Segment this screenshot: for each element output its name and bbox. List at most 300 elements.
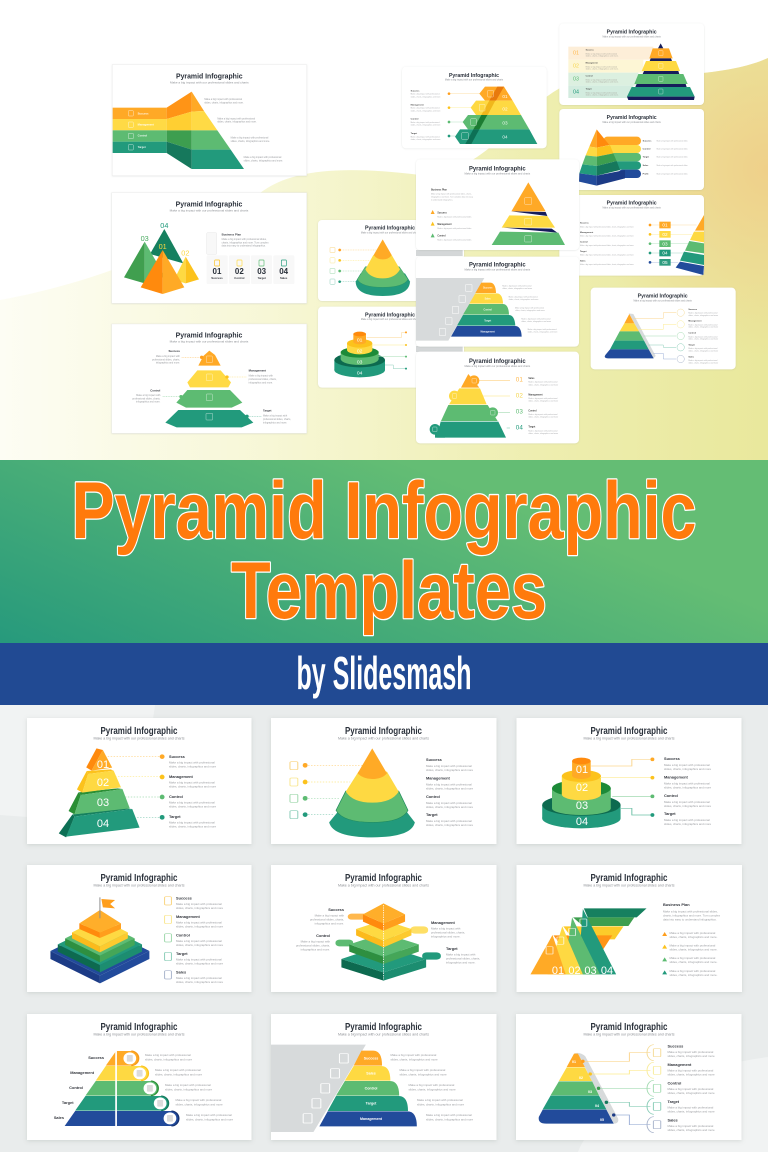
labels — [54, 1053, 233, 1122]
tier labels: Success — [169, 349, 180, 353]
heading: Make a big impact with our professional slides and charts — [602, 207, 662, 210]
group: right slides — [318, 23, 736, 443]
step labels: Sales — [366, 1072, 376, 1076]
tier labels: infographics and more. — [156, 362, 180, 365]
descriptions: slides, charts, infographics and more — [417, 1102, 464, 1106]
heading — [602, 115, 662, 124]
descriptions: Make a big impact with professional — [390, 1053, 436, 1057]
business plan text: slides, charts, infographics and more. — [670, 973, 718, 977]
labels: slides, charts, infographics and more — [176, 980, 223, 984]
heading — [361, 312, 420, 321]
stat tiles: 02 — [235, 267, 244, 276]
tier labels: professional slides, charts, — [263, 418, 291, 421]
cylinder numbers: 01 — [576, 764, 588, 776]
labels: slides, charts, infographics and more — [668, 1091, 715, 1095]
tab labels: Make a big impact with professional — [411, 94, 440, 96]
panel: staggered pyramid slide — [516, 865, 742, 992]
row labels: Make a big impact with professional slides, charts, infographics and more — [580, 235, 634, 238]
heading: Pyramid Infographic — [345, 1021, 422, 1033]
heading: Pyramid Infographic — [590, 725, 668, 737]
number boxes — [649, 222, 697, 266]
hexagon tabs pyramid chart — [448, 87, 537, 144]
heading: Make a big impact with our professional slides and charts — [170, 339, 249, 343]
heading: Pyramid Infographic — [469, 165, 526, 172]
business plan text: data into easy to understand infographics. — [663, 918, 717, 922]
side strip pyramid chart — [605, 309, 684, 363]
step descriptions: Make a big impact with professional — [521, 318, 550, 320]
bump numbers and labels: Management — [528, 393, 543, 396]
grey side pyramid chart: Control — [484, 308, 492, 311]
business plan text: Control — [437, 235, 446, 238]
labels: Make a big impact with professional — [668, 1087, 713, 1091]
heading: Pyramid Infographic — [345, 725, 422, 737]
separated tiers pyramid — [163, 351, 262, 427]
labels: Make a big impact with professional — [176, 939, 222, 943]
ribbon descriptions: slides, charts, infographics and more. — [231, 140, 270, 143]
panel: side strip pyramid slide — [591, 288, 736, 369]
group: left slides — [112, 65, 307, 433]
business plan text: Make a big impact with professional slides, — [222, 238, 267, 241]
bar labels: Make a big impact with professional slides — [657, 164, 688, 167]
heading: Pyramid Infographic — [345, 872, 422, 884]
heading: Pyramid Infographic — [638, 294, 688, 300]
panel: cone pyramid slide — [271, 718, 496, 844]
tab labels — [411, 90, 440, 141]
bump numbers and labels: Make a big impact with professional — [528, 414, 557, 416]
labels: Control — [664, 793, 678, 798]
panel: banded number slide — [559, 23, 704, 105]
labels: Make a big impact with professional — [176, 976, 222, 980]
3D pyramid with rounded bars — [579, 129, 641, 186]
labels: Success — [88, 1055, 104, 1060]
descriptions — [390, 1053, 473, 1122]
bar labels: Control — [643, 148, 651, 151]
heading — [94, 725, 185, 740]
labels: Management — [426, 776, 450, 780]
heading — [602, 201, 662, 210]
tab labels: slides, charts, infographics and more — [411, 124, 440, 127]
business plan text: Make a big impact with professional slides — [437, 239, 472, 242]
grey side pyramid chart: Management — [481, 330, 495, 333]
row labels: Make a big impact with professional slides, charts, infographics and more — [580, 225, 634, 228]
descriptions: slides, charts, infographics and more — [390, 1058, 438, 1062]
business plan text: slides, charts, infographics and more. — [670, 948, 718, 952]
business plan text: charts, infographics and more. Turn complex — [663, 914, 721, 918]
labels: slides, charts, infographics and more — [176, 906, 223, 910]
labels: slides, charts, infographics and more — [169, 764, 216, 768]
side strip labels: Management — [688, 320, 702, 323]
bar labels: Sales — [643, 165, 649, 167]
labels: slides, charts, infographics and more — [668, 1054, 715, 1058]
heading — [170, 72, 249, 85]
heading: Pyramid Infographic — [100, 1021, 178, 1033]
labels: infographics and more. — [446, 960, 476, 964]
labels: Success — [664, 756, 680, 761]
tab labels: Target — [411, 132, 417, 135]
labels: slides, charts, infographics and more — [668, 1128, 715, 1132]
labels: Management — [668, 1062, 692, 1067]
four pyramids chart — [124, 221, 199, 294]
tier labels: Control — [150, 388, 161, 392]
four pyramids chart: 03 — [141, 234, 149, 243]
labels: Make a big impact with professional — [664, 782, 710, 786]
ribbon descriptions: slides, charts, infographics and more. — [204, 101, 244, 104]
descriptions: slides, charts, infographics and more — [426, 1118, 473, 1122]
tier labels: Make a big impact with — [249, 375, 273, 378]
stat tiles: Sales — [280, 276, 288, 280]
3D numbered pyramid — [59, 748, 165, 837]
tab labels: Control — [411, 118, 419, 121]
labels: Make a big impact with — [315, 914, 344, 918]
side strip labels: Make a big impact with professional — [688, 336, 717, 338]
labels: Management — [169, 774, 193, 779]
tier labels: professional slides, charts, — [152, 358, 180, 361]
title band — [0, 460, 768, 644]
bump numbers and labels: slides, charts, infographics and more — [528, 383, 558, 386]
panel: numbered boxes slide — [559, 195, 704, 276]
heading: Make a big impact with our professional slides and charts — [633, 300, 693, 303]
panel: isometric flag pyramid slide — [27, 865, 252, 992]
step descriptions: slides, charts, infographics and more — [521, 320, 551, 323]
stat tiles: Control — [234, 276, 245, 280]
heading — [464, 358, 531, 368]
bar labels — [643, 139, 688, 175]
heading — [445, 73, 504, 82]
bump numbers and labels — [516, 376, 558, 435]
bar labels: Success — [643, 140, 652, 142]
business plan text: Success — [437, 212, 447, 214]
labels: Make a big impact with professional — [169, 780, 215, 784]
tab labels: slides, charts, infographics and more — [411, 95, 440, 98]
panel: stacked cylinders slide — [318, 307, 464, 388]
heading: Make a big impact with our professional slides and charts — [602, 35, 662, 38]
number bands: slides, charts, infographics and more. — [586, 68, 619, 71]
heading: Pyramid Infographic — [365, 312, 415, 318]
labels: slides, charts, infographics and more — [664, 804, 711, 808]
side strip labels: slides, charts, infographics and more — [688, 349, 718, 352]
row labels: Make a big impact with professional slides, charts, infographics and more — [580, 263, 634, 266]
labels: Make a big impact with professional — [176, 902, 222, 906]
byline band — [0, 643, 768, 705]
panel: business plan pyramid slide — [416, 159, 579, 250]
ribbon pyramid chart: Management — [138, 123, 154, 127]
number bands: Make a big impact with professional — [586, 53, 617, 55]
business plan text — [207, 232, 269, 254]
heading: Make a big impact with our professional slides and charts — [464, 172, 531, 175]
row labels: Make a big impact with professional slides, charts, infographics and more — [580, 253, 634, 256]
panel: bump pyramid slide — [416, 352, 579, 443]
business plan text: Make a big impact with professional slides — [437, 227, 472, 230]
labels — [296, 907, 480, 964]
side strip labels: Target — [688, 343, 695, 346]
heading — [94, 872, 185, 888]
stacked cylinders chart — [334, 331, 407, 377]
heading: Pyramid Infographic — [590, 1021, 668, 1033]
panel: four pyramids slide — [112, 193, 307, 303]
stacked cylinders chart: 03 — [357, 360, 363, 366]
cone pyramid — [290, 748, 415, 837]
row labels: Target — [580, 250, 587, 253]
tier numbers — [97, 759, 109, 830]
tier numbers: 01 — [97, 759, 109, 771]
stat tiles: Success — [211, 276, 223, 280]
step labels: Control — [365, 1086, 377, 1090]
side strip labels: slides, charts, infographics and more — [688, 338, 718, 341]
heading — [602, 29, 662, 38]
heading — [94, 1021, 185, 1036]
labels: Management — [431, 920, 455, 925]
heading: Pyramid Infographic — [607, 115, 657, 121]
row labels: Sales — [580, 260, 586, 262]
bump numbers and labels: Sales — [528, 378, 535, 380]
number bands — [568, 47, 653, 98]
descriptions: Make a big impact with professional — [426, 1113, 472, 1117]
staggered numbers: 04 — [601, 965, 613, 977]
number bands: 03 — [573, 76, 579, 82]
labels: slides, charts, infographics and more — [145, 1058, 192, 1062]
panel: 3D pyramid with bars slide — [559, 109, 704, 190]
labels: Management — [664, 774, 688, 780]
business plan text: Make a big impact with professional slides — [437, 215, 472, 218]
tier numbers: 04 — [595, 1104, 599, 1108]
labels: professional slides, charts, — [446, 956, 480, 960]
bar labels: Make a big impact with professional slides — [657, 148, 688, 151]
hexagon tabs pyramid chart: 03 — [502, 121, 508, 126]
row labels: Make a big impact with professional slides, charts, infographics and more — [580, 244, 634, 247]
bump numbers and labels: Make a big impact with professional — [528, 398, 557, 400]
labels: slides, charts, infographics and more — [176, 962, 223, 966]
wedge pyramid chart — [492, 182, 565, 245]
staggered numbers: 03 — [584, 965, 597, 977]
bump numbers and labels: slides, charts, infographics and more — [528, 400, 558, 403]
labels: infographics and more. — [301, 948, 330, 952]
heading — [170, 330, 249, 343]
side strip labels: Make a big impact with professional — [688, 313, 717, 315]
labels: Make a big impact with professional — [176, 958, 222, 962]
labels — [176, 896, 223, 984]
labels: slides, charts, infographics and more — [169, 824, 216, 828]
panel: 3D numbered pyramid slide — [27, 718, 252, 844]
labels: Sales — [54, 1115, 64, 1120]
labels: slides, charts, infographics and more — [668, 1072, 715, 1076]
hero background — [0, 0, 768, 460]
panel: cylinder stack slide — [516, 718, 742, 844]
panel: cone slide — [318, 220, 464, 301]
labels: Make a big impact with professional — [169, 820, 215, 824]
labels: Control — [426, 794, 440, 799]
tier numbers: 02 — [97, 777, 109, 789]
labels: Control — [176, 932, 190, 938]
tab labels: Management — [411, 103, 424, 106]
labels: Make a big impact with professional — [169, 800, 215, 804]
stat tiles: Target — [257, 276, 266, 280]
labels: Make a big impact with professional — [155, 1068, 201, 1072]
side strip labels: slides, charts, infographics and more — [688, 326, 718, 329]
labels: Sales — [176, 970, 186, 974]
heading: Pyramid Infographic — [590, 872, 668, 884]
labels: Make a big impact with professional — [426, 819, 472, 823]
heading — [338, 725, 429, 740]
labels: Make a big impact with professional — [186, 1113, 232, 1117]
labels — [668, 1044, 715, 1132]
business plan text: slides, charts, infographics and more. — [670, 935, 718, 939]
lower section background — [0, 705, 768, 1152]
staggered numbers: 01 — [552, 965, 564, 977]
labels: Make a big impact with professional — [668, 1050, 713, 1054]
stacked cylinders chart: 01 — [357, 338, 363, 344]
heading: Make a big impact with our professional slides and charts — [94, 1032, 185, 1036]
step labels: Management — [360, 1117, 383, 1121]
main title — [72, 466, 696, 636]
heading: Pyramid Infographic — [100, 872, 178, 884]
connector pyramid — [539, 1045, 661, 1133]
heading: Make a big impact with our professional slides and charts — [361, 231, 420, 234]
panel: grey side pyramid slide — [416, 257, 579, 347]
byline: by Slidesmash — [296, 647, 472, 699]
heading: Make a big impact with our professional slides and charts — [584, 736, 675, 740]
labels: infographics and more. — [315, 922, 344, 926]
labels: Target — [446, 946, 458, 951]
labels: Target — [664, 811, 676, 816]
staggered numbers — [552, 965, 613, 977]
heading: Make a big impact with our professional slides and charts — [338, 1032, 429, 1036]
heading: Pyramid Infographic — [607, 29, 657, 35]
heading — [464, 165, 531, 175]
number bands: Make a big impact with professional — [586, 79, 617, 81]
step labels: Success — [364, 1056, 378, 1060]
number bands: Target — [586, 87, 592, 90]
business plan text — [663, 902, 721, 977]
ribbon pyramid chart — [113, 92, 244, 169]
hero slide collage — [112, 23, 736, 443]
labels: slides, charts, infographics and more — [664, 822, 711, 826]
side strip labels: Control — [688, 332, 696, 335]
side strip labels — [688, 309, 718, 364]
labels: Make a big impact with professional — [165, 1083, 211, 1087]
labels: Make a big impact with professional — [664, 800, 710, 804]
bump numbers and labels: Target — [528, 426, 535, 429]
labels — [664, 756, 711, 826]
heading — [584, 1021, 675, 1036]
descriptions: Make a big impact with professional — [417, 1098, 463, 1102]
bump numbers and labels: 04 — [516, 425, 523, 432]
labels: slides, charts, infographics and more — [426, 805, 473, 809]
labels: slides, charts, infographics and more — [664, 767, 711, 771]
labels: Control — [169, 794, 183, 799]
number boxes: 03 — [662, 241, 668, 246]
bump numbers and labels: slides, charts, infographics and more — [528, 432, 558, 435]
step descriptions: Make a big impact with professional — [515, 307, 544, 309]
tier numbers: 05 — [600, 1118, 604, 1122]
isometric flag pyramid — [50, 897, 171, 983]
step descriptions: slides, charts, infographics and more — [502, 287, 532, 290]
business plan text: Make a big impact with professional — [670, 944, 715, 948]
business plan text: to understand infographics. — [431, 198, 454, 201]
hexagon tabs pyramid chart: 02 — [502, 106, 508, 111]
heading: Pyramid Infographic — [176, 330, 242, 339]
business plan text: slides, charts, infographics and more. — [670, 960, 718, 964]
step descriptions: slides, charts, infographics and more — [515, 309, 545, 312]
labels: Target — [62, 1100, 74, 1105]
labels: Make a big impact with professional — [145, 1053, 191, 1057]
bar labels: Make a big impact with professional slides — [657, 139, 688, 142]
row labels: Management — [580, 231, 593, 234]
labels: professional slides, charts, — [296, 944, 330, 948]
labels: Control — [316, 933, 330, 938]
business plan text: Business Plan — [431, 189, 447, 191]
bump numbers and labels: 02 — [516, 393, 523, 400]
business plan text: Make a big impact with professional — [670, 956, 715, 960]
bar labels: Profit — [643, 172, 649, 175]
descriptions: slides, charts, infographics and more — [400, 1072, 447, 1076]
stat tiles: 04 — [279, 267, 289, 276]
grey side pyramid chart: Success — [483, 288, 493, 290]
panel: ribbon pyramid slide — [112, 65, 307, 176]
labels: Make a big impact with professional — [668, 1106, 713, 1110]
stacked cylinders chart: 02 — [357, 349, 363, 355]
bump numbers and labels: Make a big impact with professional — [528, 430, 557, 432]
heading: Make a big impact with our professional slides and charts — [94, 736, 185, 740]
heading: Make a big impact with our professional slides and charts — [584, 884, 675, 888]
number bands: Control — [586, 74, 593, 77]
stat tiles — [207, 255, 294, 284]
labels: Target — [426, 812, 438, 817]
labels: Sales — [668, 1118, 678, 1122]
labels: Make a big impact with professional — [426, 782, 472, 786]
grey side pyramid chart: Sales — [485, 298, 491, 300]
ribbon descriptions: Make a big impact with professional — [244, 156, 281, 159]
panel: hexagon tabs pyramid slide — [402, 67, 547, 148]
step descriptions: Make a big impact with professional — [509, 296, 538, 298]
cylinder numbers: 03 — [576, 800, 588, 812]
bar labels: Target — [643, 156, 649, 159]
number bands: slides, charts, infographics and more. — [586, 81, 619, 84]
bump numbers and labels: 03 — [516, 409, 523, 416]
labels: Make a big impact with professional — [668, 1124, 713, 1128]
step descriptions — [502, 284, 557, 334]
business plan text: Business Plan — [222, 232, 241, 236]
side strip labels: slides, charts, infographics and more — [688, 361, 718, 364]
heading — [633, 294, 693, 303]
side strip labels: Make a big impact with professional — [688, 348, 717, 350]
number boxes: 02 — [662, 232, 668, 237]
heading — [361, 226, 420, 234]
labels: slides, charts, infographics and more — [186, 1118, 233, 1122]
staggered numbers: 02 — [568, 965, 581, 977]
labels: slides, charts, infographics and more — [664, 786, 711, 790]
step descriptions: slides, charts, infographics and more — [528, 331, 557, 334]
tier numbers: 02 — [579, 1076, 583, 1080]
panel: grey wedge pyramid slide — [271, 1014, 496, 1140]
bump pyramid chart — [430, 374, 510, 438]
tier numbers: 03 — [97, 797, 109, 809]
labels: Make a big impact with professional — [426, 764, 472, 768]
heading: Make a big impact with our professional slides and charts — [338, 736, 429, 740]
business plan text: Make a big impact with professional slides, — [663, 910, 718, 914]
tier labels — [132, 349, 291, 424]
number bands: Make a big impact with professional — [586, 66, 617, 68]
bump numbers and labels: slides, charts, infographics and more — [528, 416, 558, 419]
heading: Make a big impact with our professional slides and charts — [464, 269, 531, 272]
number bands: slides, charts, infographics and more. — [586, 94, 619, 97]
labels: Control — [69, 1085, 83, 1090]
descriptions: Make a big impact with professional — [408, 1083, 454, 1087]
cone chart — [330, 239, 410, 296]
ribbon descriptions: Make a big impact with professional — [204, 98, 242, 101]
labels: Make a big impact with professional — [426, 801, 472, 805]
labels: Management — [176, 914, 200, 919]
labels: Success — [176, 896, 192, 900]
